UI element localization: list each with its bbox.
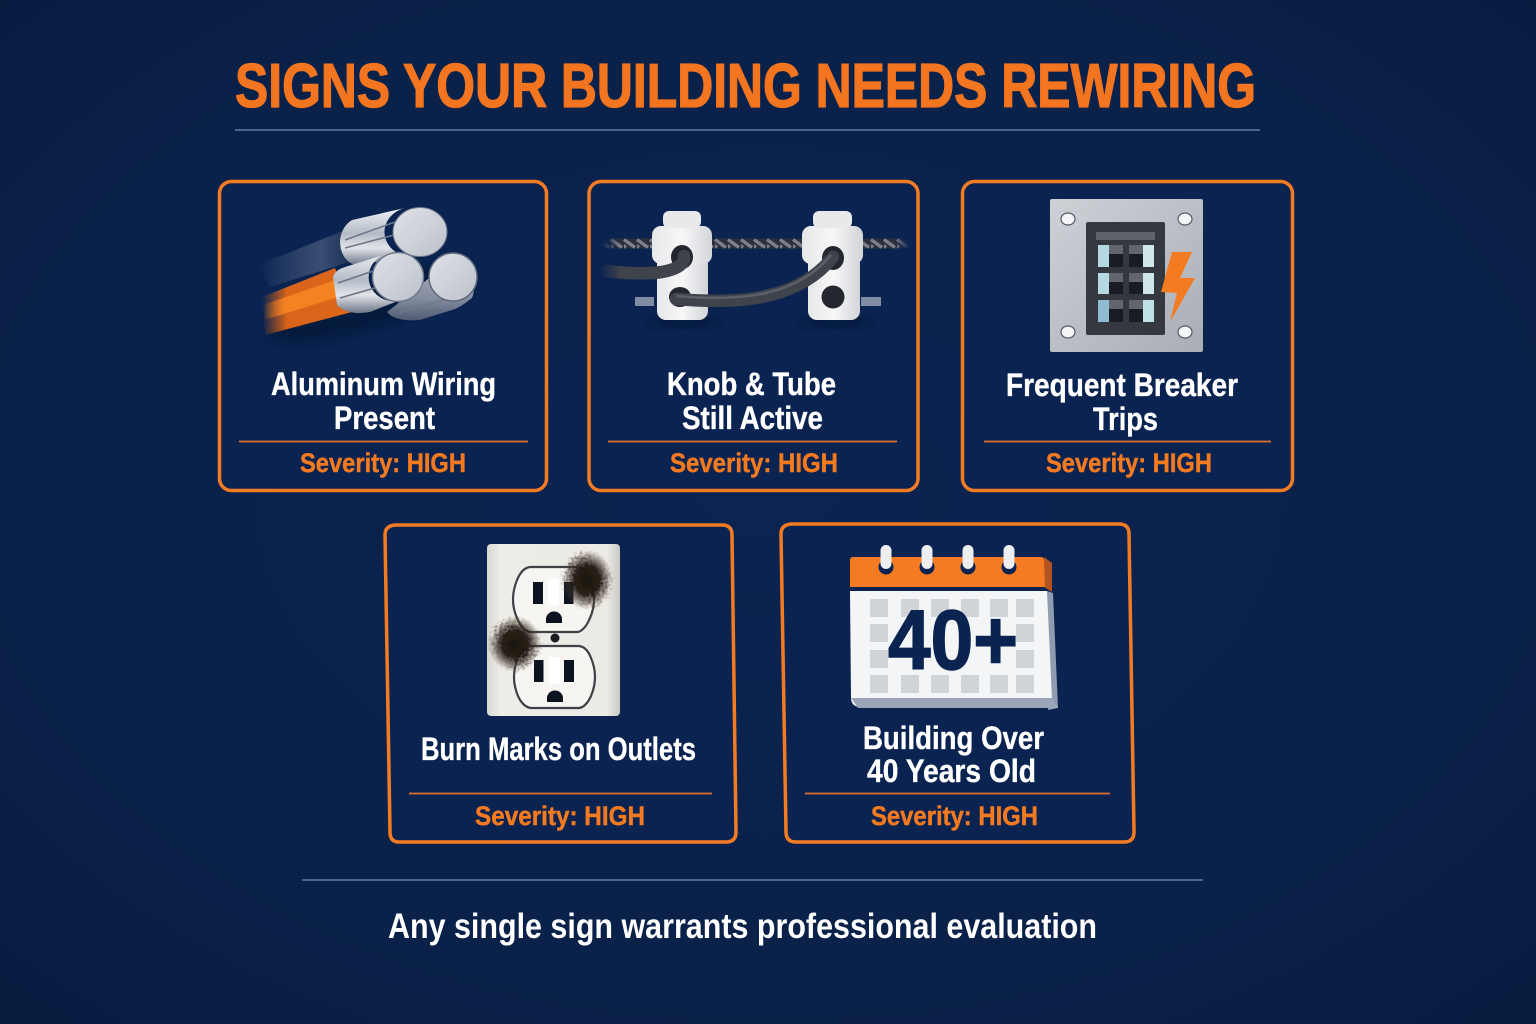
title: SIGNS YOUR BUILDING NEEDS REWIRING (235, 52, 1256, 121)
severity: Severity: HIGH (300, 448, 466, 478)
label: Knob & Tube (667, 366, 836, 402)
panel: aluminum wiring: Present (334, 400, 435, 436)
icon: aluminum wire bundle (258, 208, 478, 357)
severity: Severity: HIGH (475, 801, 645, 831)
panel: building age: 40 Years Old (867, 753, 1036, 789)
panel: breaker trips (962, 182, 1292, 490)
icon: calendar 40+: 40+ (888, 593, 1018, 687)
panel: burn marks (385, 525, 736, 842)
icon: scorched outlet (487, 544, 620, 716)
panel: aluminum wiring (220, 182, 546, 490)
label: Building Over (863, 720, 1044, 756)
footer message: Any single sign warrants professional evaluation (388, 907, 1097, 946)
severity: Severity: HIGH (871, 801, 1038, 831)
icon: breaker panel with bolt (1050, 199, 1203, 352)
label: Burn Marks on Outlets (421, 731, 696, 767)
icon: knob and tube insulators (600, 211, 910, 328)
label: Frequent Breaker (1006, 367, 1238, 403)
panel: knob and tube (589, 182, 918, 490)
panel: breaker trips: Trips (1093, 401, 1158, 437)
severity: Severity: HIGH (1046, 448, 1212, 478)
label: Aluminum Wiring (271, 366, 496, 402)
icon: calendar 40+ (850, 545, 1058, 710)
severity: Severity: HIGH (670, 448, 838, 478)
panel: building age (781, 524, 1134, 842)
panel: knob and tube: Still Active (682, 400, 823, 436)
